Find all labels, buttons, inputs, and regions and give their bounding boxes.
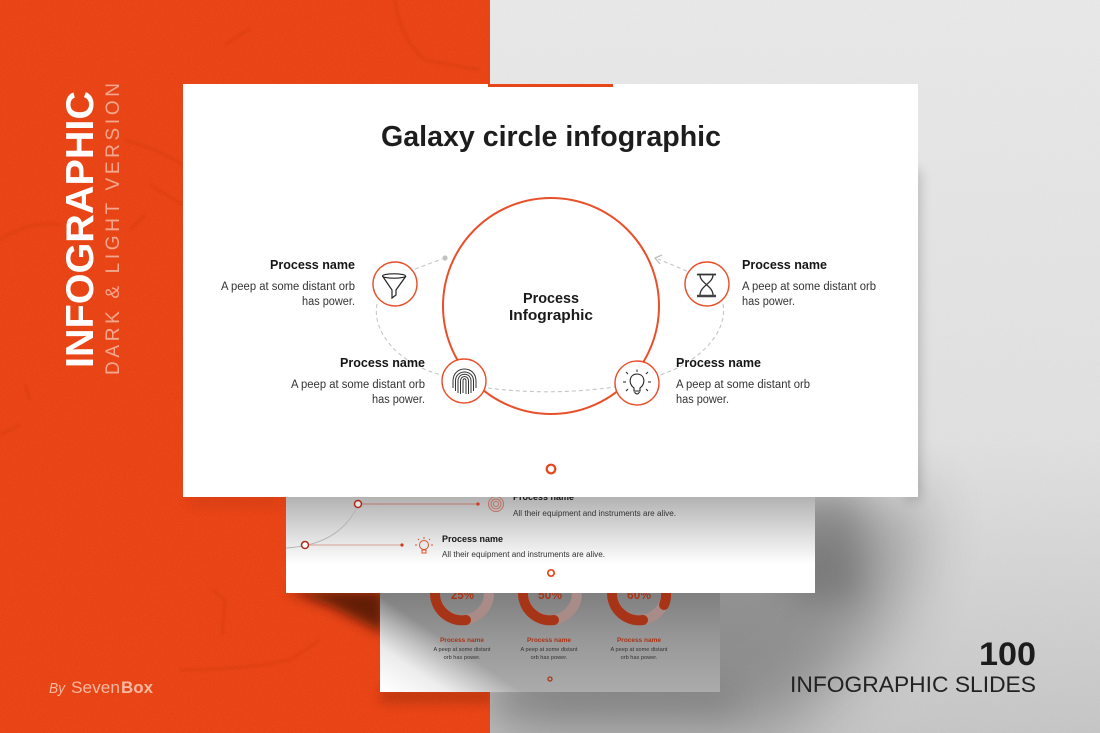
text: process bottom left: Process name — [340, 356, 425, 370]
logo: by SevenBox: By — [49, 680, 66, 697]
text: donut captions: A peep at some distant — [521, 647, 578, 653]
timeline row: lightbulb: All their equipment and instruments are alive. — [442, 550, 605, 559]
timeline row: fingerprint — [354, 492, 676, 518]
text: donut captions: A peep at some distant — [611, 647, 668, 653]
donut chart: 50 percent: 50% — [538, 587, 562, 602]
text: process top right: A peep at some distant orb — [742, 281, 876, 293]
timeline row: fingerprint: All their equipment and instruments are alive. — [513, 509, 676, 518]
panel: main white slide — [183, 84, 918, 497]
text: donut captions: orb has power. — [621, 655, 658, 661]
panel: orange marble background — [0, 0, 490, 733]
text: donut captions — [434, 637, 668, 661]
text: process bottom right: has power. — [676, 394, 729, 406]
heading: 100 infographic slides: INFOGRAPHIC SLIDES — [790, 672, 1036, 697]
timeline row: lightbulb — [302, 534, 605, 559]
logo: by SevenBox: Box — [121, 678, 154, 697]
icon: lightbulb — [615, 361, 659, 405]
text: process top left: Process name — [270, 258, 355, 272]
big central circle — [443, 198, 659, 414]
shadow: cast by stacked slides on grey paper — [490, 170, 925, 733]
icon: footer ring — [547, 465, 555, 473]
icon: fingerprint — [442, 359, 486, 403]
orbit start dot — [442, 255, 448, 261]
logo: by SevenBox — [49, 678, 154, 697]
donut chart: 60 percent — [612, 566, 666, 620]
text: process bottom left — [291, 356, 425, 406]
heading: 100 infographic slides: 100 — [979, 636, 1036, 672]
text: process top right: has power. — [742, 296, 795, 308]
text: process top left: has power. — [302, 296, 355, 308]
text: process top right: Process name — [742, 258, 827, 272]
text: donut captions: Process name — [440, 637, 484, 644]
text: donut captions: orb has power. — [444, 655, 481, 661]
title: vertical infographic wordmark: INFOGRAPHIC — [59, 91, 102, 368]
logo: by SevenBox: Seven — [71, 678, 120, 697]
text: process bottom right: Process name — [676, 356, 761, 370]
text: process bottom right: A peep at some distant orb — [676, 379, 810, 391]
text: process bottom left: A peep at some distant orb — [291, 379, 425, 391]
central label: Infographic — [509, 308, 593, 324]
icon: funnel — [373, 262, 417, 306]
orbit arrowhead — [655, 255, 662, 264]
donut chart: 50 percent — [523, 566, 577, 620]
dashed orbit paths — [376, 259, 724, 392]
donut chart: 25 percent — [435, 566, 489, 620]
text: donut captions: orb has power. — [531, 655, 568, 661]
central label: Process — [523, 291, 579, 307]
donut chart: 60 percent: 60% — [627, 587, 651, 602]
text: process top left: A peep at some distant orb — [221, 281, 355, 293]
panel: grey paper background — [490, 0, 1100, 733]
heading: slide title: Galaxy circle infographic — [381, 121, 721, 153]
timeline row: lightbulb: Process name — [442, 534, 503, 545]
icon: hourglass — [685, 262, 729, 306]
text: process top right — [742, 258, 876, 308]
text: process bottom right — [676, 356, 810, 406]
text: donut captions: Process name — [617, 637, 661, 644]
panel: middle slide with timeline — [286, 492, 815, 593]
timeline row: fingerprint: Process name — [513, 492, 574, 503]
panel: back slide with donut charts — [380, 566, 720, 692]
text: process top left — [221, 258, 355, 308]
shadow: cast by stacked slides on orange — [190, 497, 495, 702]
central label — [509, 291, 593, 324]
heading: 100 infographic slides — [790, 636, 1036, 697]
text: donut captions: Process name — [527, 637, 571, 644]
donut chart: 25 percent: 25% — [451, 587, 474, 602]
text: process bottom left: has power. — [372, 394, 425, 406]
accent bar — [488, 84, 613, 87]
text: donut captions: A peep at some distant — [434, 647, 491, 653]
subtitle: dark and light version: DARK & LIGHT VERSION — [103, 83, 124, 375]
